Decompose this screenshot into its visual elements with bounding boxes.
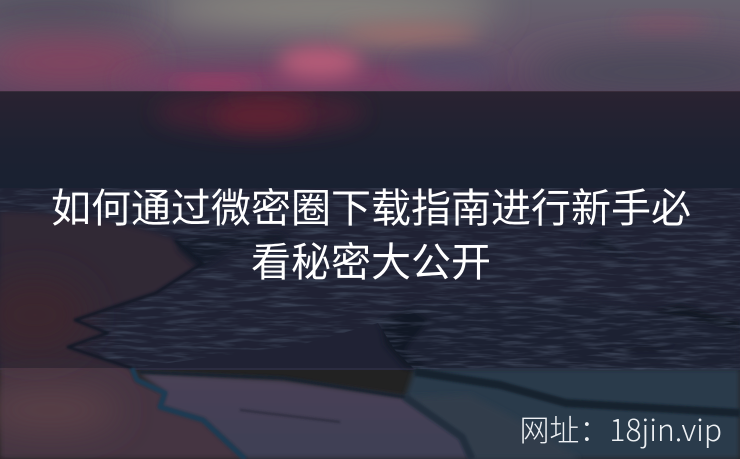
website address: 网址：18jin.vip [519,406,722,450]
sea below the horizon [0,91,740,188]
sky [0,0,740,96]
bottom right water [405,368,740,459]
rippled water and shoreline [0,188,740,459]
wet sand, centre [137,372,472,459]
title: 如何通过微密圈下载指南进行新手必 [51,176,691,234]
dark horizontal overlay band [0,92,740,368]
foam lines [68,240,740,459]
title: 看秘密大公开 [251,230,491,288]
dark wave crests [175,234,740,368]
title [51,176,691,288]
wet sand, left [0,212,245,459]
